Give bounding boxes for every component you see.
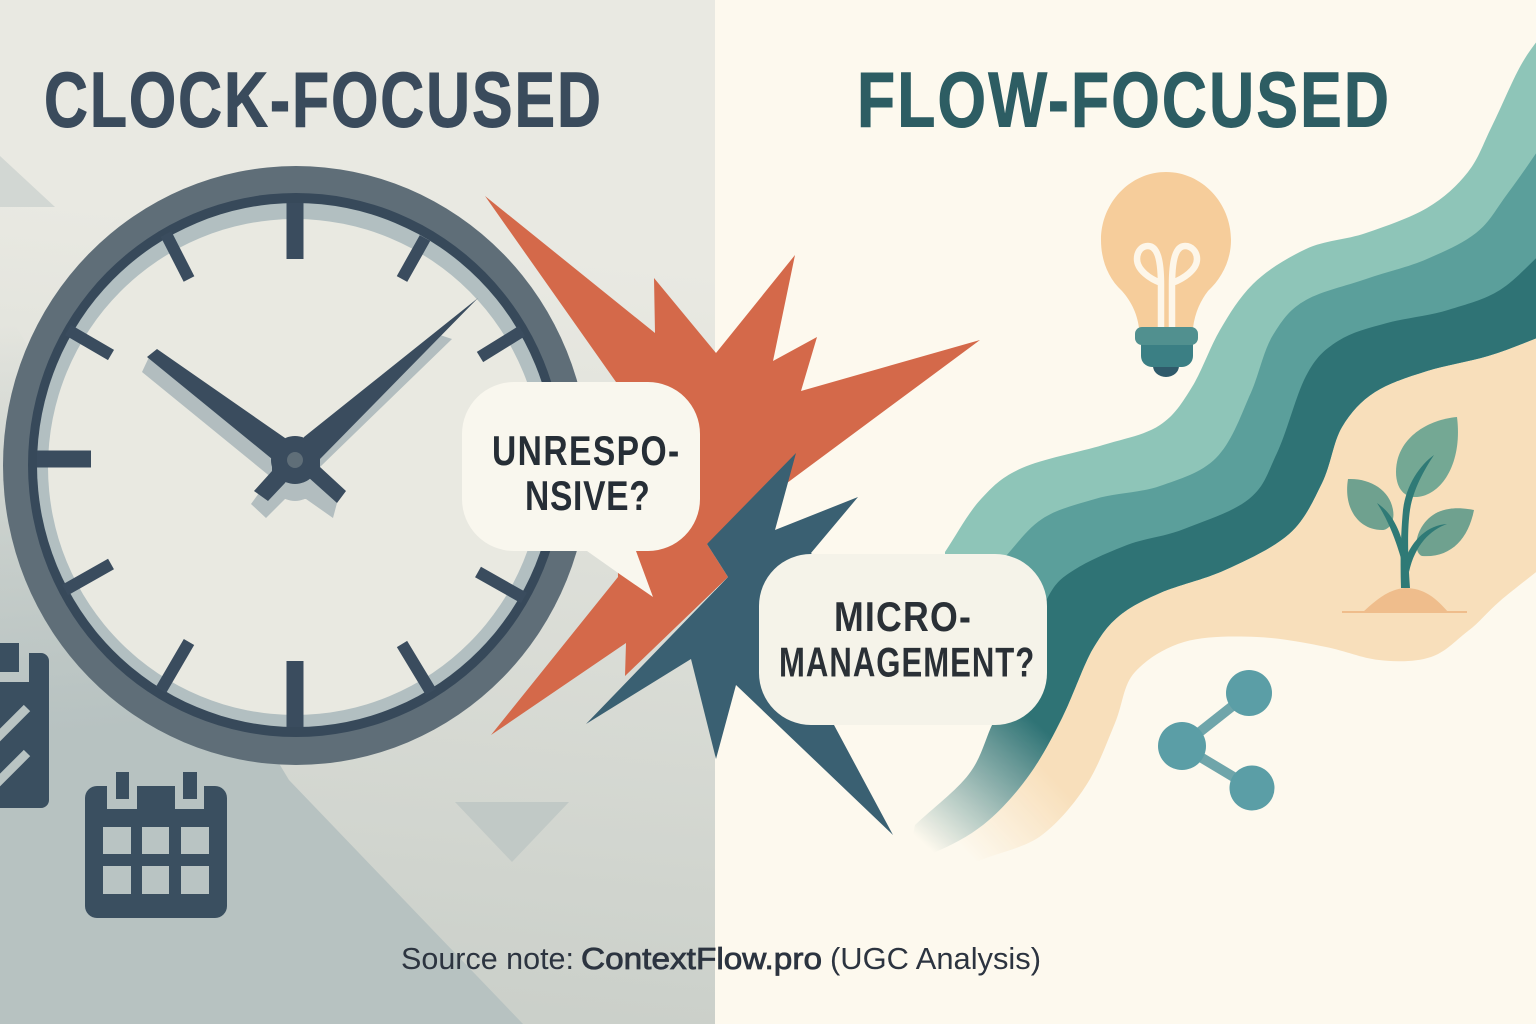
icon: clipboard	[0, 643, 49, 808]
clock hands	[147, 298, 478, 503]
source note: (UGC Analysis)	[830, 941, 1041, 976]
source note: Source note:	[401, 941, 574, 976]
source note	[401, 941, 1041, 976]
panel: clock-focused background	[0, 0, 715, 1024]
icon: sprouting plant	[1342, 417, 1474, 613]
panel: flow-focused background	[715, 0, 1536, 1024]
speech bubble: unresponsive: UNRESPO-	[492, 429, 679, 475]
clock face	[48, 219, 542, 715]
title: clock-focused: CLOCK-FOCUSED	[44, 56, 601, 143]
navy conflict burst	[586, 453, 893, 835]
clock rim	[3, 166, 589, 765]
source note: ContextFlow.pro	[581, 941, 822, 976]
icon: wall clock	[3, 166, 589, 765]
orange conflict burst	[485, 196, 980, 735]
speech bubble: unresponsive: NSIVE?	[525, 474, 650, 520]
icon: network share nodes	[1158, 670, 1274, 810]
icon: calendar	[85, 772, 227, 918]
speech bubble: micromanagement: MANAGEMENT?	[779, 639, 1034, 686]
flowing wave illustration	[915, 42, 1536, 855]
hour ticks	[37, 203, 524, 727]
icon: light bulb	[1101, 172, 1231, 377]
speech bubble: micromanagement: MICRO-	[834, 594, 971, 641]
clock hand shadows	[142, 335, 452, 518]
title: flow-focused: FLOW-FOCUSED	[857, 56, 1389, 143]
speech bubble: micromanagement	[759, 554, 1047, 725]
speech bubble: unresponsive	[462, 382, 700, 597]
